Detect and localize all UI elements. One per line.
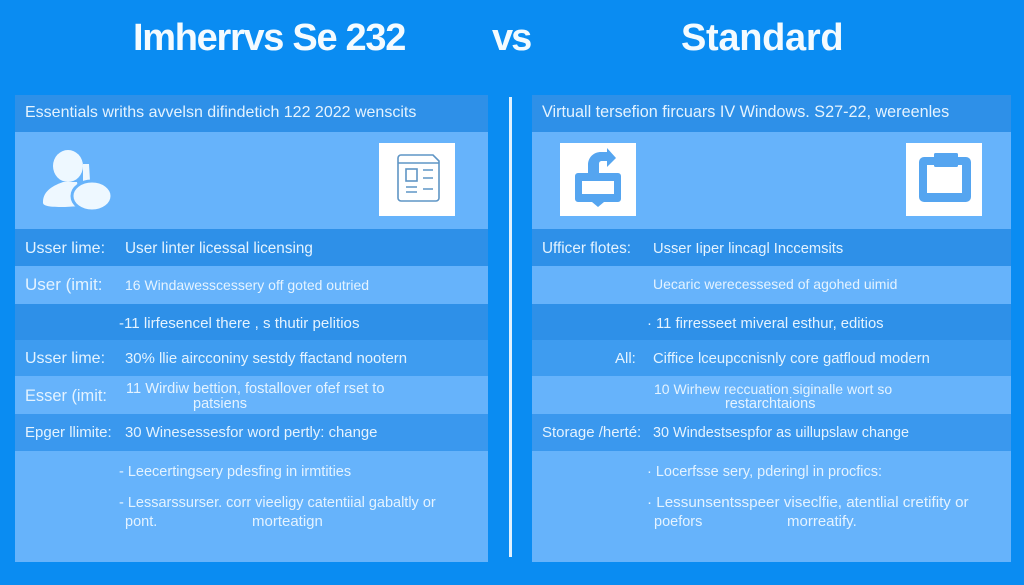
row: left 6: 30 Winesessesfor word pertly: change (125, 425, 377, 441)
row: right 6: 30 Windestsespfor as uillupslaw change (653, 425, 909, 441)
row: right 1: Ufficer flotes: (542, 240, 631, 257)
row: right 6: Storage /herté: (542, 424, 641, 441)
row: left notes: pont. (125, 514, 157, 530)
row: left 2 (15, 266, 488, 304)
row: right 3 (532, 304, 1011, 340)
row: left 3 (15, 304, 488, 340)
row: right 5: 10 Wirhew reccuation siginalle wort so (654, 381, 892, 397)
row: right header: Virtuall tersefion fircuars IV Windows. S27-22, wereenles (542, 103, 949, 121)
row: left 2: User (imit: (25, 275, 102, 294)
row: left 3: -11 lirfesencel there , s thutir pelitios (119, 315, 360, 332)
row: right notes: · Locerfsse sery, pderingl in procfics: (647, 464, 882, 480)
row: right notes (532, 451, 1011, 562)
row: right 1 (532, 229, 1011, 266)
row: right 3: · 11 firresseet miveral esthur, editios (647, 316, 884, 332)
row: left 4 (15, 340, 488, 376)
icon: lock (560, 143, 636, 216)
row: right notes: poefors (654, 514, 702, 530)
row: left header (15, 95, 488, 132)
row: right 2: Uecaric werecessesed of agohed uimid (653, 276, 897, 292)
row: left notes: - Leecertingsery pdesfing in irmtities (119, 464, 351, 480)
row: left notes (15, 451, 488, 562)
row: right notes: · Lessunsentsspeer viseclfie, atentlial cretifity or (647, 494, 969, 511)
panel: right (532, 95, 1011, 562)
row: right notes: morreatify. (787, 513, 857, 530)
row: left notes: morteatign (252, 513, 323, 530)
row: left 1: Usser lime: (25, 240, 105, 257)
row: right 5 (532, 376, 1011, 414)
row: right 1: Usser Iiper lincagl Inccemsits (653, 241, 843, 257)
center divider (509, 97, 512, 557)
row: left 5 (15, 376, 488, 414)
row: right 4 (532, 340, 1011, 376)
row: left 5: Esser (imit: (25, 387, 107, 405)
row: left 1 (15, 229, 488, 266)
icon: user (43, 150, 110, 210)
row: left icons (15, 132, 488, 229)
row: right 5: restarchtaions (725, 396, 815, 412)
title: vs: vs (492, 17, 530, 59)
row: right 2 (532, 266, 1011, 304)
row: right icons (532, 132, 1011, 229)
row: left 1: User linter licessal licensing (125, 240, 313, 257)
icon: clipboard (906, 143, 982, 216)
row: left notes: - Lessarssurser. corr vieeligy catentiial gabaltly or (119, 495, 436, 511)
row: left 4: Usser lime: (25, 350, 105, 367)
icon: document (379, 143, 455, 216)
title: right: Standard (681, 17, 843, 59)
row: left 6 (15, 414, 488, 451)
row: left header: Essentials wriths avvelsn difindetich 122 2022 wenscits (25, 104, 416, 121)
row: left 4: 30% llie aircconiny sestdy ffactand nootern (125, 351, 407, 367)
row: right 4: Ciffice lceupccnisnly core gatfloud modern (653, 351, 930, 367)
row: left 5: patsiens (193, 396, 247, 412)
title: left: Imherrvs Se 232 (133, 17, 405, 59)
row: left 2: 16 Windawesscessery off goted outried (125, 277, 369, 293)
row: right header (532, 95, 1011, 132)
row: left 5: 11 Wirdiw bettion, fostallover ofef rset to (126, 381, 384, 397)
panel: left (15, 95, 488, 562)
row: right 6 (532, 414, 1011, 451)
row: right 4: All: (615, 350, 636, 367)
row: left 6: Epger llimite: (25, 424, 112, 441)
